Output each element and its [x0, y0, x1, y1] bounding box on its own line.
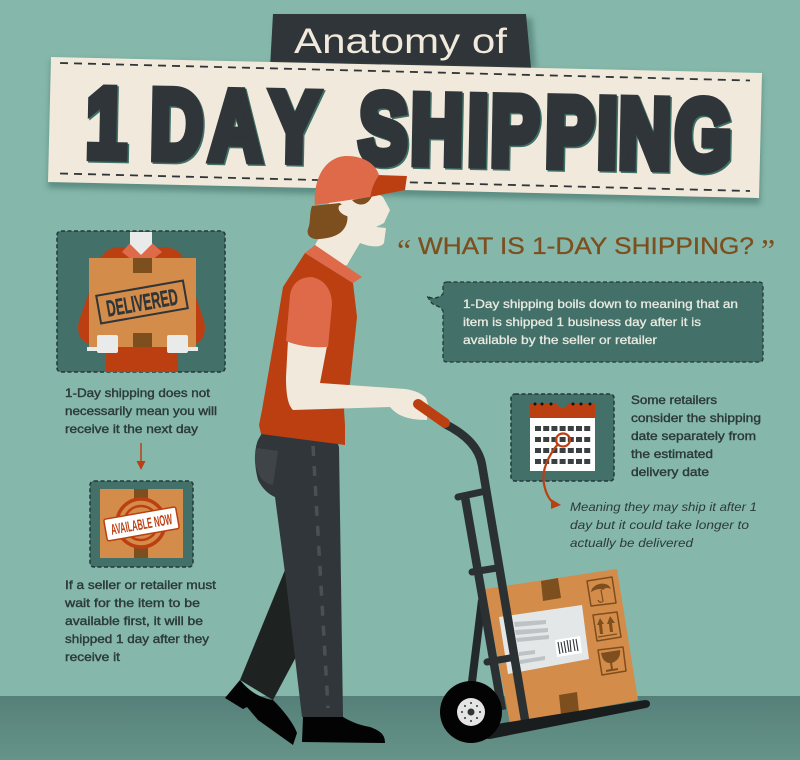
- hands: [87, 335, 198, 353]
- wheel: [440, 681, 502, 743]
- text: delivered note: [65, 386, 217, 436]
- cap visor: [370, 175, 407, 197]
- text: delivered note: 1-Day shipping does not: [65, 386, 211, 400]
- text: available note: available first, it will be: [65, 614, 203, 628]
- collar: [122, 243, 162, 268]
- box: [89, 258, 196, 347]
- panel: available now illustration: [90, 481, 193, 567]
- ear: [338, 205, 356, 217]
- front leg: [255, 433, 343, 717]
- arm: [286, 340, 428, 420]
- arrow: down: [136, 443, 146, 470]
- heading: what is 1-day shipping: ”: [761, 232, 775, 268]
- text: italic note: actually be delivered: [570, 536, 693, 550]
- front shoe: [302, 717, 385, 743]
- neck and face: [315, 190, 390, 267]
- title tab: Anatomy of: [270, 14, 536, 68]
- title banner: 1 DAY SHIPPING: [85, 69, 732, 190]
- shipping label: [499, 605, 589, 674]
- text: italic note: [570, 500, 757, 550]
- handling icon: arrows up: [593, 612, 621, 641]
- title tab: Anatomy of: Anatomy of: [294, 22, 507, 61]
- cap crown: [315, 156, 379, 205]
- back leg: [240, 570, 297, 700]
- handle grip: [418, 404, 445, 423]
- base plate: [470, 700, 650, 739]
- title banner: 1 DAY SHIPPING: [87, 70, 734, 192]
- stitching: [313, 446, 328, 708]
- handling icon: umbrella: [587, 577, 616, 606]
- text: delivered note: necessarily mean you will: [65, 404, 217, 418]
- text: retailers note: consider the shipping: [631, 411, 761, 425]
- heading: what is 1-day shipping: [397, 232, 775, 268]
- text: retailers note: [631, 393, 761, 479]
- delivery person: [225, 156, 445, 745]
- speech bubble: 1-Day shipping boils down to meaning that an: [463, 297, 738, 311]
- speech bubble: [427, 282, 763, 362]
- shirt: [259, 253, 357, 445]
- text: retailers note: date separately from: [631, 429, 756, 443]
- text: available note: [64, 578, 217, 664]
- handling icon: fragile glass: [598, 647, 626, 675]
- floor: [0, 696, 800, 760]
- package box: [485, 569, 638, 724]
- barcode: [555, 636, 582, 657]
- hand truck rear strut: [471, 600, 482, 690]
- text: available note: wait for the item to be: [64, 596, 200, 610]
- collar: [305, 245, 362, 283]
- hair: [308, 203, 348, 239]
- back shoe: [225, 680, 297, 745]
- heading: what is 1-day shipping: “: [397, 232, 411, 268]
- sleeve: [286, 277, 332, 347]
- text: italic note: day but it could take longer to: [570, 518, 749, 532]
- text: delivered note: receive it the next day: [65, 422, 198, 436]
- text: available note: If a seller or retailer must: [65, 578, 217, 592]
- speech bubble: item is shipped 1 business day after it is: [463, 315, 701, 329]
- text: retailers note: Some retailers: [631, 393, 717, 407]
- panel: delivered illustration: [57, 231, 225, 372]
- stamp: delivered: [96, 281, 188, 323]
- speech bubble: available by the seller or retailer: [463, 333, 657, 347]
- text: retailers note: the estimated: [631, 447, 713, 461]
- panel: calendar: [511, 394, 614, 481]
- stamp: delivered: DELIVERED: [104, 283, 180, 322]
- text: available note: receive it: [65, 650, 121, 664]
- shirt: [78, 247, 205, 372]
- text: italic note: Meaning they may ship it after 1: [570, 500, 757, 514]
- panel: available now illustration: AVAILABLE NOW: [110, 511, 174, 539]
- heading: what is 1-day shipping: WHAT IS 1-DAY SHIPPING?: [418, 233, 754, 260]
- pocket: [255, 448, 278, 485]
- arrow: calendar to note: [543, 434, 570, 509]
- hand truck frame: [445, 424, 650, 739]
- text: retailers note: delivery date: [631, 465, 709, 479]
- text: available note: shipped 1 day after they: [65, 632, 209, 646]
